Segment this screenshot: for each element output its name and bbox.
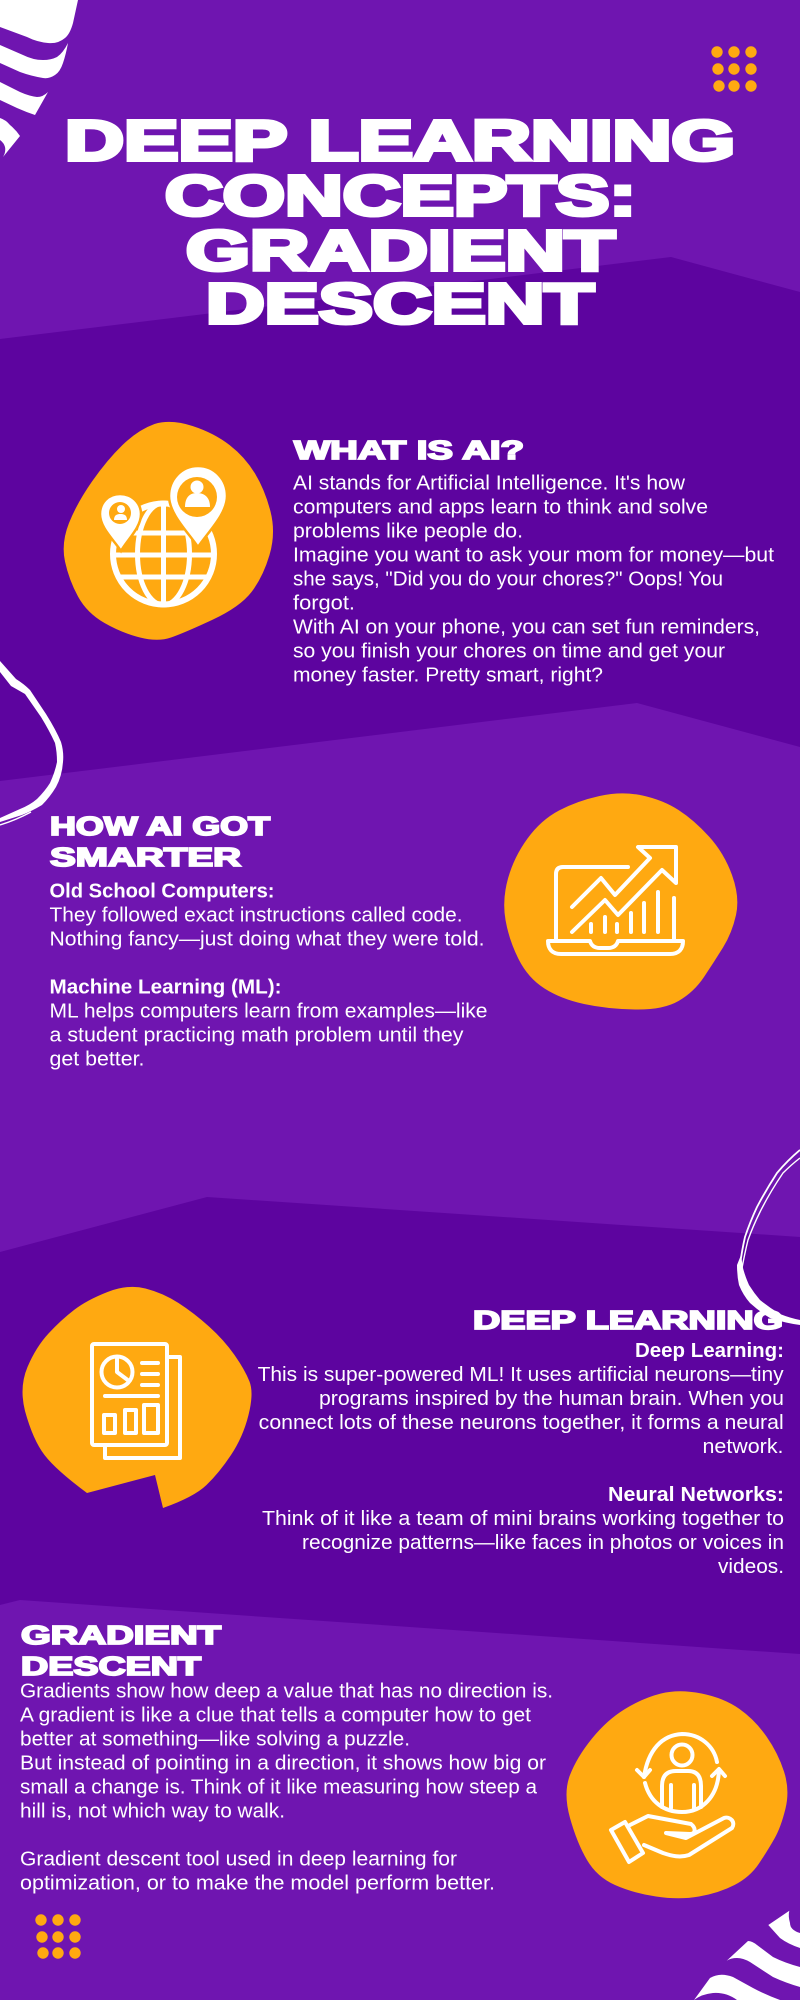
text block: how AI got smarter: get better. [50,1048,144,1071]
text block: gradient descent: better at something—like solving a puzzle. [20,1728,410,1751]
background band: dark middle [0,1197,800,1654]
blob: orange behind globe icon [64,422,273,640]
title: CONCEPTS: [165,164,636,228]
decoration: top-right orange dots [711,46,757,92]
heading: gradient descent: DESCENT [21,1651,201,1681]
panel: deep learning [23,1150,800,1578]
text block: how AI got smarter: Old School Computers: [50,880,274,903]
decoration: left white brush loop [0,661,63,825]
text block: what is AI: money faster. Pretty smart, right? [293,664,603,686]
text block: deep learning: recognize patterns—like faces in photos or voices in [302,1531,784,1554]
text block: what is AI: Imagine you want to ask your mom for money—but [293,544,774,566]
text block: gradient descent: But instead of pointing in a direction, it shows how big or [20,1752,546,1775]
background band: dark top [0,257,800,781]
text block: what is AI: so you finish your chores on time and get your [293,640,725,662]
text block: gradient descent: Gradient descent tool used in deep learning for [20,1848,457,1871]
heading: how AI got smarter [50,811,270,872]
heading: how AI got smarter: SMARTER [50,842,241,872]
blob: orange behind chart icon [504,793,737,1010]
text block: what is AI: AI stands for Artificial Intelligence. It's how [293,472,685,494]
decoration: bottom-right white waves [694,1911,800,2000]
text block: gradient descent: optimization, or to make the model perform better. [20,1872,495,1895]
text block: how AI got smarter [50,880,488,1071]
icon: report document [92,1344,180,1458]
text block: deep learning [258,1339,784,1578]
text block: how AI got smarter: Nothing fancy—just doing what they were told. [50,928,485,951]
title: GRADIENT [186,219,615,283]
text block: what is AI: computers and apps learn to think and solve [293,496,708,518]
text block: deep learning: videos. [718,1555,784,1578]
panel: gradient descent [20,1620,787,1898]
text block: what is AI: problems like people do. [293,520,523,542]
heading: gradient descent: GRADIENT [21,1620,221,1650]
text block: gradient descent: hill is, not which way to walk. [20,1800,285,1823]
text block: deep learning: Neural Networks: [608,1483,784,1506]
title: DEEP LEARNING [65,109,735,173]
heading: what is AI: WHAT IS AI? [294,435,524,465]
panel: how AI got smarter [50,793,737,1071]
text block: gradient descent: Gradients show how deep a value that has no direction is. [20,1680,553,1703]
text block: deep learning: Think of it like a team of mini brains working together to [262,1507,784,1530]
text block: how AI got smarter: ML helps computers learn from examples—like [50,1000,488,1023]
decoration: right white brush loop [737,1150,800,1325]
heading: gradient descent [21,1620,221,1681]
icon: globe with location pins [100,466,227,605]
text block: deep learning: network. [702,1435,784,1458]
panel: what is AI [64,422,774,686]
text block: deep learning: connect lots of these neurons together, it forms a neural [259,1411,784,1434]
title [65,109,735,336]
text block: gradient descent: A gradient is like a clue that tells a computer how to get [20,1704,531,1727]
pin: large [169,466,227,547]
text block: what is AI: With AI on your phone, you can set fun reminders, [293,616,760,638]
title: DESCENT [206,272,594,336]
text block: deep learning: This is super-powered ML! It uses artificial neurons—tiny [258,1363,784,1386]
text block: what is AI: she says, "Did you do your chores?" Oops! You [293,568,723,590]
icon: laptop growth chart [548,847,683,954]
blob: orange behind person icon [566,1691,787,1898]
text block: how AI got smarter: They followed exact instructions called code. [50,904,462,927]
text block: deep learning: Deep Learning: [635,1339,784,1362]
icon: person in cycle over hand [611,1734,733,1862]
text block: deep learning: programs inspired by the human brain. When you [319,1387,784,1410]
blob: orange behind document icon [23,1287,252,1508]
heading: how AI got smarter: HOW AI GOT [50,811,270,841]
text block: what is AI [293,472,774,686]
text block: gradient descent: small a change is. Think of it like measuring how steep a [20,1776,538,1799]
text block: gradient descent [20,1680,553,1895]
heading: deep learning: DEEP LEARNING [473,1305,783,1335]
text block: how AI got smarter: Machine Learning (ML): [50,976,282,999]
pin: small [100,494,141,551]
decoration: top-left white waves [0,0,78,157]
decoration: bottom-left orange dots [35,1914,81,1959]
text block: what is AI: forgot. [293,592,355,614]
text block: how AI got smarter: a student practicing math problem until they [50,1024,464,1047]
